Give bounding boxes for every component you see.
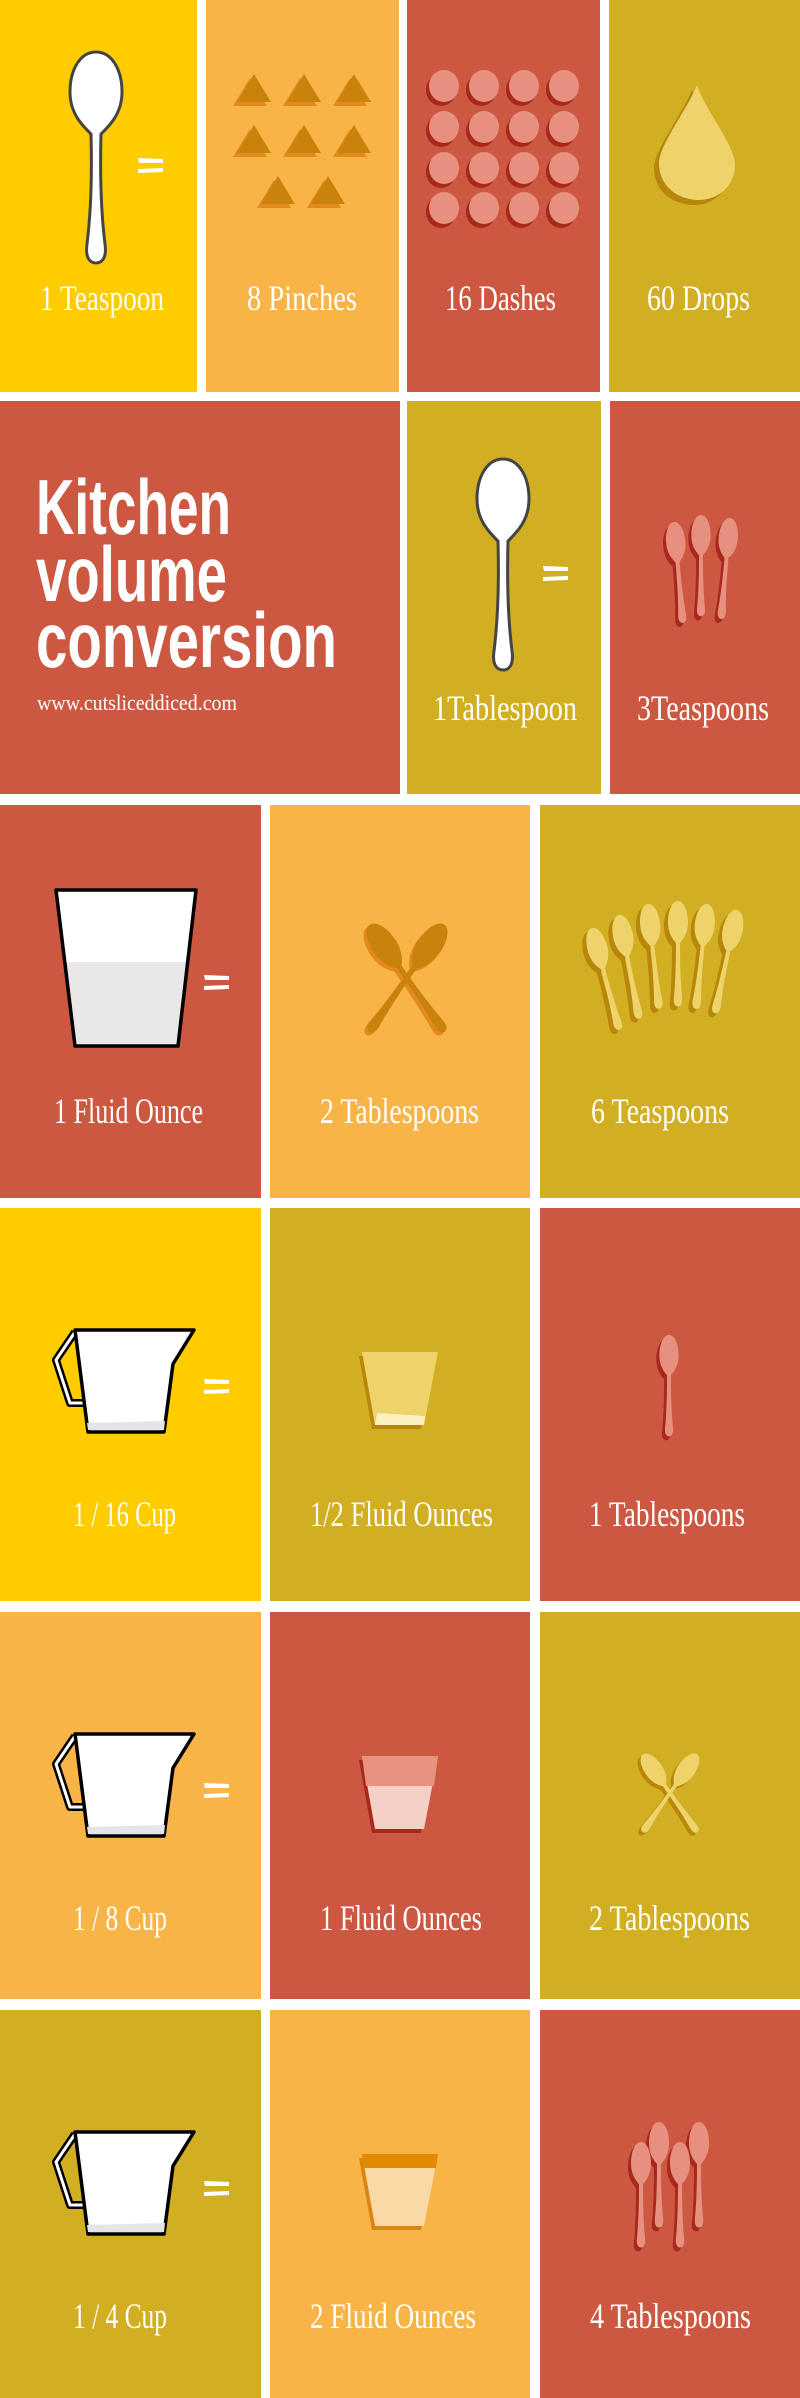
panel: 1 fluid ounce: [0, 805, 261, 1198]
panel: 6 teaspoons: [540, 805, 800, 1198]
title: volume: [36, 530, 227, 618]
panel: 1/8 cup: [0, 1612, 261, 1999]
icon: three spoons: [661, 515, 740, 628]
icon: triangles: [233, 74, 371, 208]
icon: crossed spoons: [356, 918, 455, 1042]
url: www.cutsliceddiced.com: [37, 690, 237, 715]
label: 1Tablespoon: [433, 688, 577, 728]
icon: big spoon: [70, 52, 122, 263]
label: 60 Drops: [647, 278, 750, 318]
label: 1 Teaspoon: [40, 278, 164, 318]
icon: measuring cup: [56, 1330, 194, 1432]
panel: 2 tablespoons: [270, 805, 530, 1198]
label: 1/2 Fluid Ounces: [310, 1494, 493, 1534]
label: 1 Tablespoons: [589, 1494, 745, 1534]
equals sign: [204, 2181, 229, 2196]
icon: big spoon: [477, 459, 529, 670]
icon: spoon: [656, 1335, 679, 1440]
panel: 1 teaspoon: [0, 0, 197, 392]
panel: 60 drops: [609, 0, 800, 392]
icon: small glass: [359, 2154, 438, 2230]
label: 2 Tablespoons: [589, 1898, 750, 1938]
label: 2 Fluid Ounces: [310, 2296, 476, 2336]
panel: 1/4 cup: [0, 2010, 261, 2398]
equals sign: [543, 566, 568, 581]
label: 8 Pinches: [247, 278, 357, 318]
panel: 2 tablespoons yellow: [540, 1612, 800, 1999]
icon: six spoons: [578, 901, 747, 1036]
label: 1 / 16 Cup: [73, 1494, 176, 1534]
label: 2 Tablespoons: [320, 1091, 479, 1131]
icon: measuring cup: [56, 2132, 194, 2234]
panel: 1 fluid ounces: [270, 1612, 530, 1999]
equals sign: [204, 1783, 229, 1798]
icon: crossed spoons: [632, 1749, 705, 1840]
icon: dots: [426, 70, 579, 228]
panel: 1/16 cup: [0, 1208, 261, 1601]
panel: 1 tablespoon: [407, 401, 601, 794]
panel: 16 dashes: [407, 0, 600, 392]
label: 1 / 4 Cup: [73, 2296, 167, 2336]
icon: drop: [654, 85, 735, 205]
panel: title: [0, 401, 400, 794]
icon: small glass: [359, 1756, 438, 1833]
equals sign: [204, 1379, 229, 1394]
label: 1 Fluid Ounces: [320, 1898, 482, 1938]
icon: four spoons: [628, 2122, 709, 2252]
equals sign: [138, 158, 163, 173]
panel: 3 teaspoons: [610, 401, 800, 794]
equals sign: [204, 975, 229, 990]
title: conversion: [36, 596, 337, 684]
panel: 4 tablespoons: [540, 2010, 800, 2398]
label: 16 Dashes: [445, 278, 556, 318]
title: [36, 463, 337, 684]
label: 1 Fluid Ounce: [54, 1091, 203, 1131]
label: 6 Teaspoons: [591, 1091, 729, 1131]
label: 4 Tablespoons: [590, 2296, 751, 2336]
icon: glass: [56, 890, 196, 1046]
icon: measuring cup: [56, 1734, 194, 1836]
panel: 8 pinches: [206, 0, 399, 392]
panel: 2 fluid ounces: [270, 2010, 530, 2398]
panel: 1 tablespoons: [540, 1208, 800, 1601]
panel: 1/2 fluid ounces: [270, 1208, 530, 1601]
title: Kitchen: [36, 463, 231, 551]
icon: small glass: [359, 1352, 438, 1429]
label: 1 / 8 Cup: [73, 1898, 167, 1938]
